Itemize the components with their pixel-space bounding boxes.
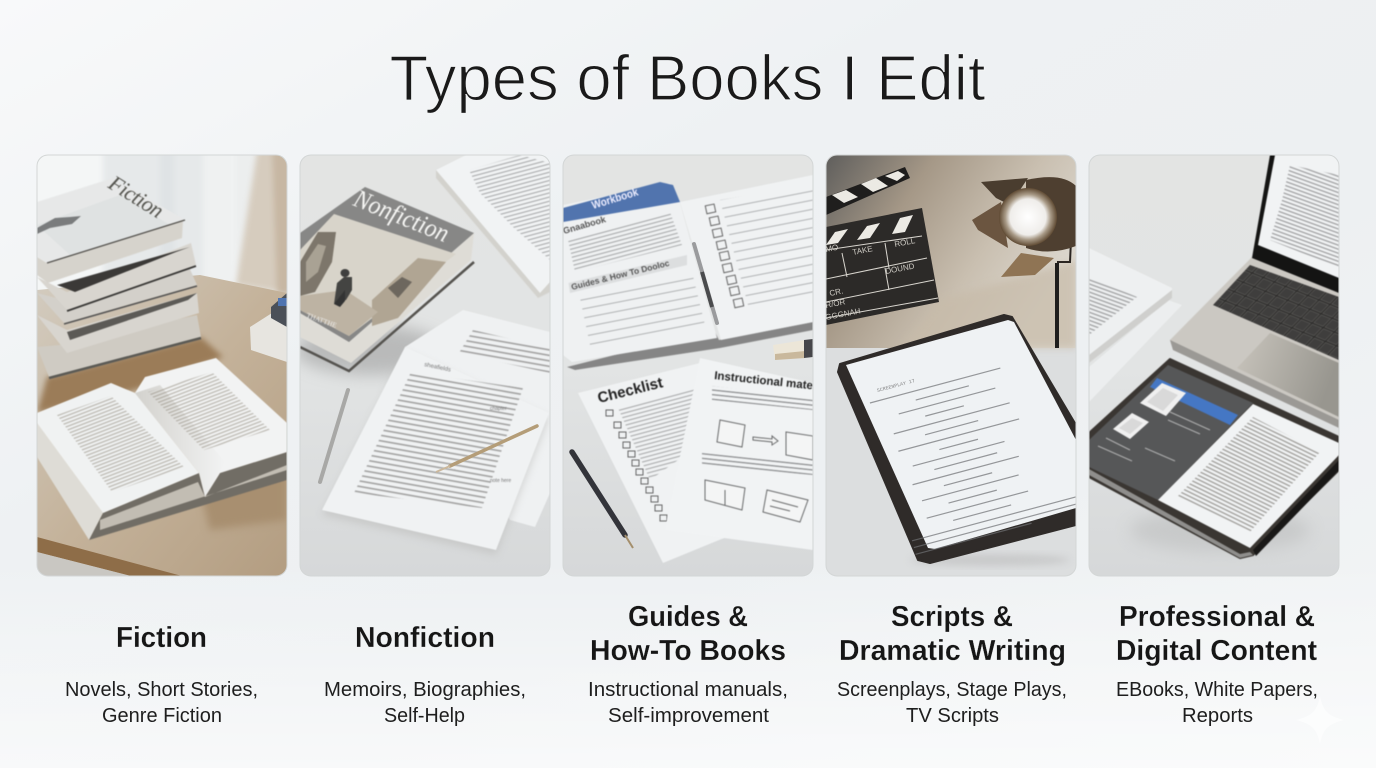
- nonfiction title: Nonfiction: [349, 183, 453, 248]
- heading: guides: [590, 601, 786, 667]
- description: guides: [588, 679, 788, 727]
- panel: guides: [562, 155, 831, 576]
- tablet sidebar text: [1098, 412, 1210, 461]
- panel border: [37, 155, 287, 576]
- instruction diagrams: [705, 420, 813, 522]
- silver pencil: [320, 390, 348, 482]
- checklist sheet: Checklist: [596, 374, 665, 407]
- heading: guides: Guides &: [628, 601, 748, 633]
- description: fiction: Novels, Short Stories,: [65, 679, 258, 701]
- panel border: [1089, 155, 1339, 576]
- clapperboard labels: TAKE: [852, 244, 873, 257]
- script page text: [870, 368, 1076, 555]
- open book: [37, 358, 287, 540]
- front manuscript sheet: note here: [490, 478, 511, 484]
- panel: fiction: [38, 156, 286, 576]
- tablet blue bar: [1150, 378, 1238, 425]
- nonfiction book: THATTHE: [305, 311, 338, 330]
- sheet shadow: [324, 418, 549, 554]
- laptop trackpad: [1237, 333, 1339, 417]
- description: guides: Self-improvement: [608, 705, 769, 727]
- description: guides: Instructional manuals,: [588, 679, 788, 701]
- description: fiction: Genre Fiction: [102, 705, 222, 727]
- document thumbnails: [1113, 383, 1186, 439]
- heading: professional: Professional &: [1119, 601, 1315, 633]
- cover artwork: [300, 232, 446, 336]
- back manuscript sheet: [405, 310, 550, 527]
- instructional sheet: [666, 358, 812, 550]
- panel border: [300, 155, 550, 576]
- clapperboard: [825, 167, 939, 325]
- panel border: [563, 155, 813, 576]
- book stack: [37, 170, 201, 378]
- checklist sheet: [578, 363, 724, 563]
- clapperboard labels: [825, 236, 916, 322]
- tablet shadow: [910, 554, 1070, 566]
- gold pencil: [436, 426, 537, 472]
- description: professional: [1116, 679, 1318, 727]
- small closed books on the table: [250, 293, 287, 362]
- open workbook: [562, 175, 813, 370]
- panel: professional: [1089, 155, 1339, 576]
- laptop keyboard: [1213, 265, 1339, 360]
- heading: scripts: [839, 601, 1066, 667]
- laptop: [1170, 155, 1339, 428]
- heading: professional: [1116, 601, 1317, 667]
- clapperboard labels: CR.: [829, 286, 844, 298]
- open workbook: Guides & How To Dooloc: [570, 258, 671, 292]
- heading: professional: Digital Content: [1116, 635, 1317, 667]
- top right manuscript: [436, 155, 550, 298]
- panel: nonfiction: [295, 155, 550, 576]
- heading: guides: How-To Books: [590, 635, 786, 667]
- clapperboard labels: ROLL: [894, 236, 916, 249]
- fiction cover title: Fiction: [104, 170, 168, 223]
- panel border: [826, 155, 1076, 576]
- digital tablet: [1089, 359, 1339, 558]
- workbook header band: [563, 182, 680, 222]
- panel: scripts: [825, 155, 1090, 576]
- heading: fiction: Fiction: [116, 622, 207, 654]
- workbook title: Workbook: [590, 186, 641, 212]
- curtain background: [159, 156, 286, 293]
- film light: [972, 177, 1076, 348]
- front manuscript sheet: sheafields: [424, 362, 451, 374]
- description: professional: EBooks, White Papers,: [1116, 679, 1318, 701]
- clapperboard labels: DOUND: [885, 261, 915, 276]
- description: scripts: Screenplays, Stage Plays,: [837, 679, 1067, 701]
- clapperboard labels: R/OR: [825, 297, 846, 310]
- script page text: SCREENPLAY 17: [876, 378, 916, 394]
- book shadow: [295, 325, 445, 375]
- title: Types of Books I Edit: [390, 42, 986, 114]
- clapperboard labels: GGGNAH: [825, 306, 862, 322]
- heading: scripts: Scripts &: [891, 601, 1013, 633]
- description: scripts: [837, 679, 1067, 727]
- workbook pen: [694, 244, 717, 323]
- tablet shadow: [1130, 508, 1310, 552]
- instructional sheet: Instructional material: [714, 370, 831, 394]
- description: professional: Reports: [1182, 705, 1253, 727]
- description: scripts: TV Scripts: [906, 705, 999, 727]
- description: nonfiction: [324, 679, 526, 727]
- wooden table: [37, 275, 287, 576]
- script tablet: [838, 315, 1090, 563]
- front manuscript sheet: [322, 347, 549, 550]
- black pen: [572, 452, 633, 548]
- heading: scripts: Dramatic Writing: [839, 635, 1066, 667]
- nonfiction book: [300, 183, 474, 371]
- open workbook: Gnaabook: [562, 214, 608, 236]
- description: nonfiction: Memoirs, Biographies,: [324, 679, 526, 701]
- description: nonfiction: Self-Help: [384, 705, 465, 727]
- marker: [773, 339, 813, 360]
- heading: nonfiction: Nonfiction: [355, 622, 495, 654]
- icon: sparkle: [1296, 696, 1344, 744]
- front manuscript sheet: chapter: [490, 406, 507, 412]
- clapperboard labels: MO: [825, 243, 839, 254]
- paper stack: [1089, 248, 1182, 402]
- description: fiction: [65, 679, 258, 727]
- workbook checklist: [705, 204, 744, 308]
- fiction book silhouette: [37, 216, 81, 234]
